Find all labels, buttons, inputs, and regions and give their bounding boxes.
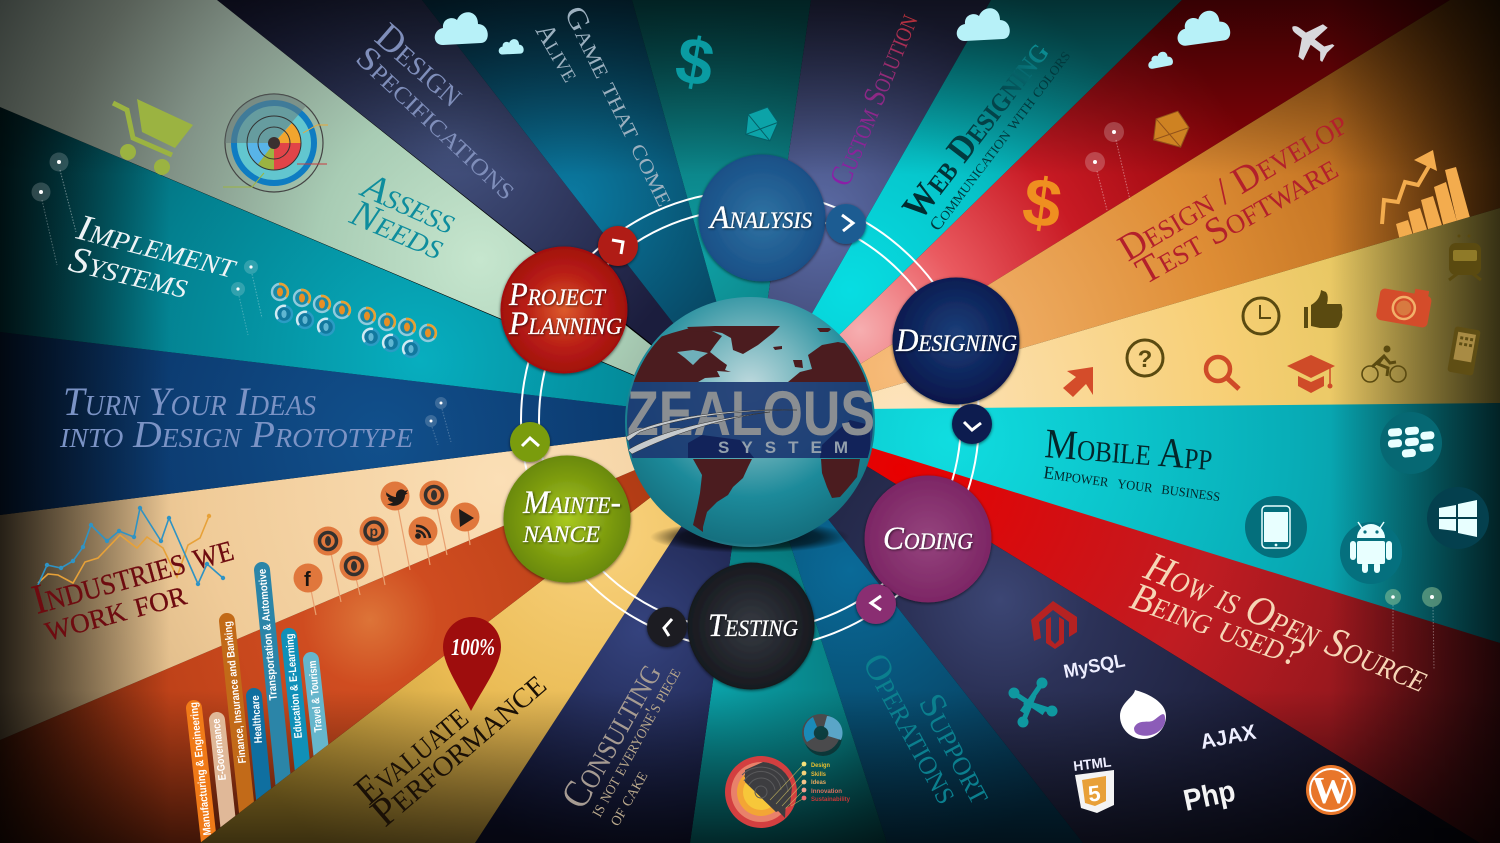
node: analysis [698,154,826,282]
logo swoosh [626,410,797,454]
process ring [521,191,979,649]
icon: orange dollar: $ [1018,163,1066,243]
heading: design develop test software: Design / Develop [1111,102,1354,270]
icon: tablet phone [1262,506,1290,548]
chevron: analysis [826,204,866,244]
node: project planning: Planning [508,306,622,342]
greenland [687,326,780,354]
chevron: coding [856,584,896,624]
chevron: maintenance [510,422,550,462]
ray: assess needs [0,0,750,424]
ray: testing charts [690,420,887,843]
chevron connectors [510,204,992,647]
africa [821,459,860,498]
icon: pinterest: p [370,523,378,539]
donut chart [804,716,843,756]
heading: assess needs: Needs [344,191,451,268]
heading: design develop test software: Test Software [1129,146,1345,293]
globe logo [625,297,875,547]
industry bar labels: Travel & Tourism [307,660,325,733]
node: coding [864,476,992,602]
ray: design develop test [750,0,1500,432]
heading: implement systems [65,207,241,307]
ray: icons band [750,208,1500,428]
heading: how is open source being used: Being used? [1125,573,1310,676]
icon: question: ? [1138,346,1152,373]
chart legend: Skills [811,771,826,778]
chevron: designing [952,404,992,444]
ray: web designing [750,0,1182,422]
chevron: testing [647,607,687,647]
heading: support operations: Operations [854,647,968,810]
heading: web designing: Communication with colors [925,46,1074,234]
icon: clock [1243,298,1279,334]
globe shadow [650,521,850,553]
ray: industries [0,421,750,740]
heading: implement systems: Implement [72,207,241,287]
south america [693,459,752,532]
heading: game that come alive: Game that come [558,1,682,211]
ray: game that come alive [422,0,750,422]
heading: web designing: Web Designing [895,33,1057,227]
ray: design specifications [217,0,750,422]
node: testing: Testing [708,608,798,644]
heading: implement systems: Systems [65,239,192,307]
industry bar labels: E-Governance [211,718,229,781]
icon: joomla [1008,678,1058,728]
logo band [625,382,875,458]
process nodes [500,154,1020,690]
heading: mobile app: Mobile App [1043,421,1214,480]
heading: design specifications: Specifications [349,40,524,207]
node: designing [892,278,1020,404]
node: analysis: Analysis [708,200,812,236]
ray: evaluate performance [200,421,750,843]
heading: consulting: is not everyone's piece [585,664,685,820]
heading: industries we work for: Industries we [27,524,238,624]
icon: wordpress [1306,765,1356,815]
europe and asia [788,342,867,382]
britain [793,360,803,368]
node: project planning: Project [508,277,607,313]
mobile platform icons [1245,412,1489,584]
icon: html5 shield: 5 [1087,780,1102,807]
industry bar labels: Manufacturing & Engineering [188,701,214,836]
icon: orange envelope [1151,106,1192,148]
node: coding: Coding [883,521,973,557]
globe sphere [625,297,875,547]
heading: turn your ideas: Turn Your Ideas [63,379,316,424]
icon: html5 shield [1075,770,1114,813]
radial bar chart [725,756,804,828]
icon: magento [1031,601,1077,649]
ray: consulting [475,420,750,843]
heading: game that come alive [530,1,682,211]
continents [633,326,867,532]
svalbard [817,328,831,332]
icon: red arrow [1063,367,1093,397]
callout: 100 percent pin: 100% [451,635,495,661]
iceland [773,346,782,350]
icon: train [1449,234,1481,280]
label: AJAX: AJAX [1199,721,1258,754]
icon: graduation cap [1287,355,1335,393]
industry bar labels: Education & E-Learning [284,633,305,739]
icon: drupal [1120,690,1166,739]
ray: technologies [750,419,1480,843]
icon: camera [1375,283,1433,328]
callout: 100 percent pin [443,617,501,711]
heading: evaluate performance: Performance [362,661,554,835]
chart legend: Innovation [811,788,842,795]
heading: game that come alive: Alive [530,18,587,87]
ray: open source [750,410,1500,843]
heading: how is open source being used: How is Open Source [1137,543,1435,702]
ray: teal dollar [632,0,811,422]
icon: question [1127,340,1163,376]
chart legend [802,762,850,803]
icon: wordpress: W [1312,770,1350,812]
heading: mobile app [1042,421,1222,505]
industry bar labels: Finance, Insurance and Banking [222,620,249,764]
icon: phone [1447,326,1481,376]
icon: plane [1280,10,1341,70]
ray: turn your ideas [0,332,750,515]
heading: industries we work for: work for [39,572,190,650]
icon: windows [1439,500,1477,537]
heading: evaluate performance: Evaluate [346,694,476,813]
target dial chart [223,94,328,192]
node: testing [688,562,814,690]
heading: industries we work for [27,524,238,650]
icon: blackberry [1387,425,1436,459]
icon: bicycle [1362,346,1406,382]
heading: design specifications: Design [367,15,473,115]
industry bars [194,570,333,843]
label: HTML: HTML [1072,753,1113,774]
industry bar labels: Healthcare [250,695,265,744]
node: project planning [500,246,628,374]
heading: support operations: Support [910,687,1002,811]
label: MySQL: MySQL [1062,650,1127,683]
icon: facebook: f [304,569,311,591]
heading: assess needs: Assess [354,164,462,243]
chevron: project planning [598,226,638,266]
heading: turn your ideas: into Design Prototype [59,414,414,456]
ray: support operations [750,420,1083,843]
heading: turn your ideas [59,379,414,456]
chart legend: Ideas [811,779,826,786]
ray: custom solution [750,0,991,422]
industry bar labels: Transportation & Automotive [257,568,280,701]
label: Php: Php [1181,775,1238,818]
social pins [294,480,480,615]
hudson bay [677,350,708,365]
node: maintenance [504,456,630,582]
node: maintenance: Mainte- [522,485,621,521]
icon: search [1206,357,1239,389]
open source technology logos [1008,601,1356,818]
icon: twitter [385,489,408,506]
icon: play [459,509,474,527]
icon: shopping cart [113,99,193,175]
node: maintenance: nance [522,514,600,550]
logo subtitle: SYSTEM [718,438,848,457]
icon: thumbs up [1304,290,1342,328]
chart legend: Design [811,762,830,769]
heading: consulting: of cake [603,767,652,830]
icon: growth chart [1382,150,1472,245]
ray: red cloud [750,0,1450,432]
icon: teal dollar: $ [670,22,719,101]
chart legend: Sustainability [811,796,850,803]
heading: mobile app: Empower your business [1042,462,1222,505]
logo wordmark: ZEALOUS [627,379,875,449]
coin icons [272,284,436,357]
icon: rss [416,526,430,538]
ray: orange bars [0,421,750,843]
industry bar labels [188,568,325,836]
north america [633,328,731,382]
line chart behind industries [38,506,225,586]
heading: consulting: Consulting [552,654,670,815]
icon: android [1350,522,1392,573]
node: designing: Designing [895,323,1017,359]
heading: assess needs [344,164,462,268]
ray: implement systems [0,107,750,425]
icon: teal envelope [743,103,781,142]
clouds [435,8,1231,69]
pin markers [32,122,1442,669]
ray: mobile app [750,403,1500,643]
